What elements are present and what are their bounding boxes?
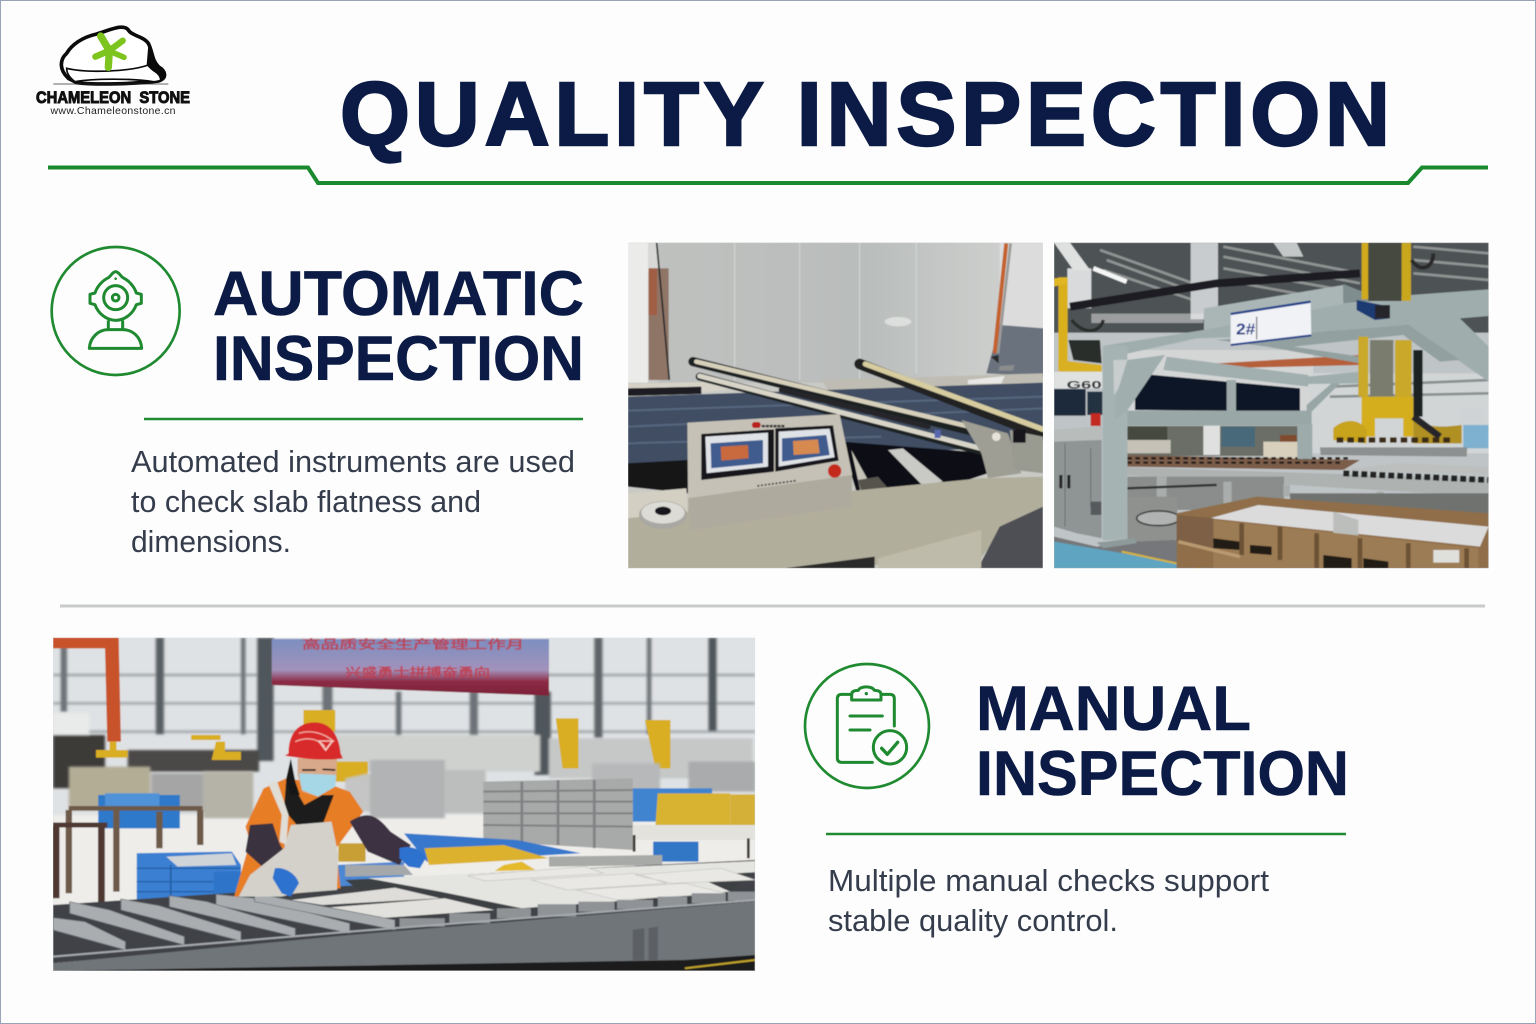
head — [298, 758, 337, 797]
photo: worker checking slabs — [51, 635, 757, 975]
body text: manual inspection: stable quality control. — [828, 903, 1118, 938]
slanted rails — [53, 893, 395, 950]
belt — [628, 383, 1043, 467]
tilted rails — [693, 362, 1043, 453]
ceiling — [1054, 243, 1489, 333]
logo url: www.Chameleonstone.cn — [50, 105, 176, 117]
logo wordmark: CHAMELEON STONE — [36, 88, 190, 107]
sign — [1231, 302, 1311, 345]
yellow machines — [96, 710, 670, 782]
photo: slab handling gantry 2#: G60 — [1067, 379, 1102, 391]
heading: automatic inspection: AUTOMATIC — [213, 259, 584, 329]
body text: manual inspection: Multiple manual checks support — [828, 863, 1269, 898]
back equipment — [1127, 426, 1301, 456]
control box — [686, 414, 853, 498]
photo: slab handling gantry 2# — [1050, 240, 1497, 570]
panel: automatic inspection — [52, 247, 584, 559]
logo rock mark — [53, 27, 168, 84]
left tables — [69, 808, 202, 893]
photo: worker checking slabs: 兴盛勇士拼搏奋勇向 — [345, 665, 490, 680]
lower background — [1127, 350, 1314, 411]
body text: automatic inspection — [131, 444, 575, 559]
steel frame and slabs — [53, 862, 755, 963]
machine front — [628, 477, 1043, 568]
heading: automatic inspection: INSPECTION — [213, 324, 584, 394]
blue and yellow crates back — [98, 795, 180, 828]
yellow lifter — [1362, 243, 1368, 299]
red crane — [53, 638, 121, 742]
heading rule — [826, 833, 1346, 835]
photo: inspection machine with control panel: ■■■■■■ — [761, 423, 785, 429]
photo: inspection machine with control panel — [628, 240, 1045, 570]
dark gap — [846, 442, 988, 491]
back rail — [628, 382, 726, 392]
body text: automatic inspection: dimensions. — [131, 524, 291, 559]
hand wheel — [639, 501, 687, 529]
front steel beam — [53, 902, 755, 971]
title: QUALITY INSPECTION — [340, 65, 1390, 165]
wooden crate — [1177, 497, 1489, 568]
body text: automatic inspection: to check slab flatness and — [131, 484, 481, 519]
icon: clipboard with check — [805, 664, 929, 788]
logo frog — [95, 36, 124, 67]
photo: slab handling gantry 2#: 2# — [1236, 321, 1255, 338]
header rule — [48, 168, 1488, 183]
G60 machine — [1054, 372, 1102, 388]
gantry frame — [1103, 289, 1489, 382]
floor — [1054, 536, 1178, 563]
logo: Chameleon Stone — [36, 27, 190, 117]
roller table — [1127, 455, 1360, 470]
dark panel under the frame — [1135, 373, 1300, 412]
body text: manual inspection — [828, 863, 1269, 938]
yellow left machine — [1058, 277, 1068, 367]
front blue crates — [137, 852, 241, 902]
heading: manual inspection: MANUAL — [976, 674, 1251, 744]
photo: worker checking slabs: 高品质安全生产管理工作月 — [302, 637, 524, 652]
divider — [60, 604, 1485, 608]
heading: manual inspection: INSPECTION — [976, 739, 1349, 809]
helmet — [285, 722, 343, 760]
icon: inspection camera — [52, 247, 180, 375]
heading rule — [144, 418, 583, 420]
stone stacks — [69, 760, 755, 818]
hall background — [53, 638, 755, 975]
heading: manual inspection — [976, 674, 1349, 809]
worker — [234, 778, 363, 897]
body text: automatic inspection: Automated instruments are used — [131, 444, 575, 479]
heading: automatic inspection — [213, 259, 584, 394]
panel: manual inspection — [805, 664, 1349, 938]
banner — [272, 639, 549, 696]
